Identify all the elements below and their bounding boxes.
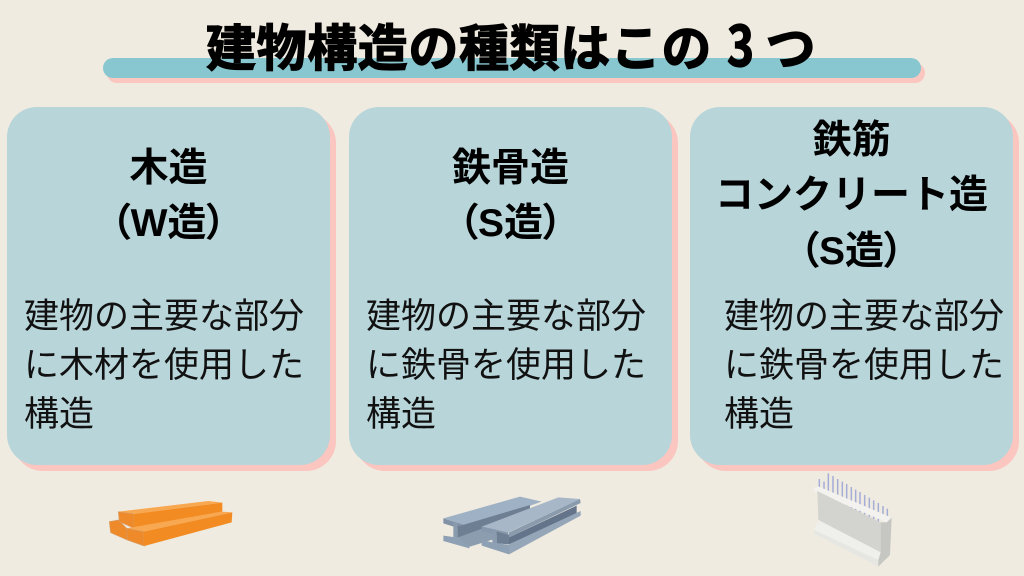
panel: steel [349,107,672,465]
heading: reinforced concrete abbreviation: （S造） [799,230,904,273]
text: steel description: に鉄骨を使用した [366,346,646,385]
text: wood description: 構造 [24,395,94,434]
text: wood description [24,297,304,434]
text: reinforced concrete description: 建物の主要な部分 [724,297,1004,336]
panel: wood [7,107,330,465]
text: reinforced concrete description: 構造 [724,395,794,434]
text: wood description: 建物の主要な部分 [24,297,304,336]
heading: steel abbreviation: （S造） [458,202,562,245]
text: steel description: 建物の主要な部分 [366,297,646,336]
panel: reinforced concrete [690,107,1013,465]
title: 建物構造の種類はこの つ [206,21,816,77]
heading: wood: 木造 [129,147,208,190]
text: reinforced concrete description [724,297,1004,434]
icon: reinforced concrete beam [814,473,892,566]
heading: steel: 鉄骨造 [452,147,569,190]
text: reinforced concrete description: に鉄骨を使用した [724,346,1004,385]
heading: reinforced concrete: 鉄筋 [812,119,890,162]
title: 3 [726,2,754,83]
text: wood description: に木材を使用した [24,346,304,385]
heading: reinforced concrete line 2: コンクリート造 [715,174,988,217]
text: steel description [366,297,646,434]
icon: steel H-beams [443,496,581,554]
title underline bar [103,58,925,83]
icon: lumber stack [109,501,232,546]
text: steel description: 構造 [366,395,436,434]
heading: wood abbreviation: （W造） [111,202,226,245]
title [206,2,816,83]
